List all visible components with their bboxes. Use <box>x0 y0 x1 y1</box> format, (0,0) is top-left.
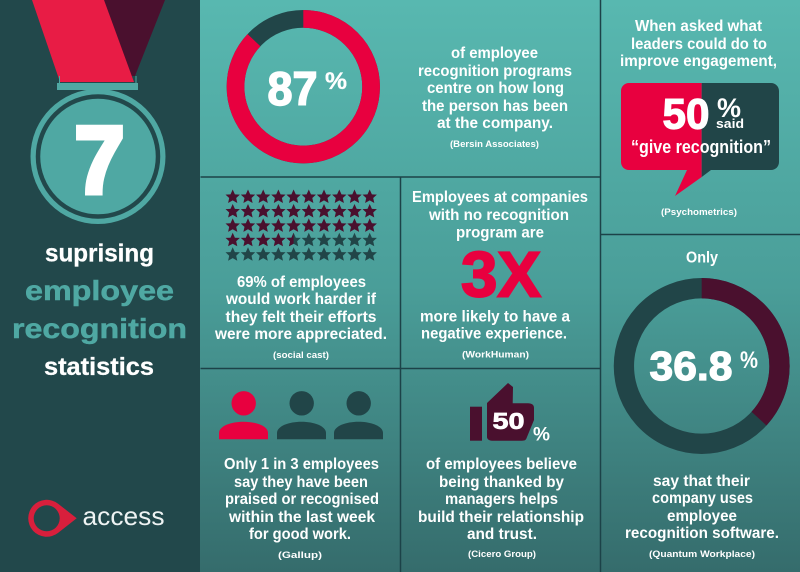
text block: recognition software. <box>625 525 779 542</box>
text block: intro <box>412 189 588 242</box>
text block: improve engagement, <box>620 53 777 70</box>
stat: 50% <box>492 408 550 446</box>
text block: they felt their efforts <box>226 309 376 326</box>
text block: (Bersin Associates) <box>450 139 539 150</box>
icon: people <box>219 391 383 439</box>
text block: of employee <box>451 45 538 62</box>
panel: stars <box>214 190 387 361</box>
stat: 87%: % <box>325 68 347 95</box>
text block: managers helps <box>445 491 558 508</box>
panel: 87 percent <box>235 19 572 154</box>
text block: 69% of employees <box>237 274 366 291</box>
text block: say they have been <box>234 474 368 491</box>
text block <box>418 456 584 560</box>
text block: outcome <box>420 308 570 360</box>
text block: praised or recognised <box>225 491 379 508</box>
text block <box>418 45 572 150</box>
text block: would work harder if <box>225 291 377 308</box>
source: (Psychometrics) <box>661 207 737 218</box>
panel: 3X <box>412 189 588 360</box>
donut chart: 87% <box>235 19 371 154</box>
text block: leaders could do to <box>631 36 767 53</box>
text block: and trust. <box>467 526 537 543</box>
text block: say that their <box>653 473 750 490</box>
text block: were more appreciated. <box>214 326 387 343</box>
stat: 3X: 3X <box>461 238 541 310</box>
title: suprising <box>45 240 154 268</box>
donut chart: 36.8% <box>624 288 780 444</box>
text block: centre on how long <box>427 80 564 97</box>
logo: access <box>28 500 165 537</box>
stat: 50% said <box>631 90 771 157</box>
text block: (Gallup) <box>278 550 322 561</box>
stat: 87% <box>268 62 347 115</box>
text block: When asked what <box>635 18 762 35</box>
text block: within the last week <box>228 509 375 526</box>
title: recognition <box>12 313 187 344</box>
text block: intro: with no recognition <box>428 207 569 224</box>
text block: of employees believe <box>426 456 577 473</box>
stat: 50%: % <box>533 424 550 446</box>
title: statistics <box>44 353 154 381</box>
stat: 50% said: 50 <box>662 90 710 138</box>
stat: 50% said: % <box>717 93 741 123</box>
panel: 1 in 3 <box>219 391 383 561</box>
text block: being thanked by <box>439 474 564 491</box>
icon: medal <box>30 0 166 224</box>
stat: 87%: 87 <box>268 62 318 115</box>
text block: recognition programs <box>418 63 572 80</box>
title: employee <box>25 275 174 306</box>
text block <box>214 274 387 361</box>
medal number: 7 <box>74 107 124 214</box>
text block: intro: Employees at companies <box>412 189 588 206</box>
logo: access: access <box>82 501 164 531</box>
text block: (social cast) <box>273 350 329 361</box>
main background <box>200 0 800 572</box>
text block: intro: program are <box>456 224 544 242</box>
heading: only: Only <box>686 250 718 266</box>
icon: thumbs up <box>470 383 534 441</box>
speech bubble <box>621 83 779 196</box>
text block: employee <box>667 508 737 525</box>
sidebar background <box>0 0 200 572</box>
text block: at the company. <box>437 115 553 132</box>
stat: 50% said: said <box>716 116 744 131</box>
panel: 36.8 percent <box>624 250 780 560</box>
panel: 50% said <box>620 18 779 218</box>
text block: build their relationship <box>418 509 584 526</box>
text block: the person has been <box>422 98 568 115</box>
stat: 36.8%: 36.8 <box>650 343 732 389</box>
text block: Only 1 in 3 employees <box>224 456 379 473</box>
title <box>12 240 187 381</box>
text block: (Quantum Workplace) <box>649 549 755 560</box>
star chart: 69% <box>226 190 377 261</box>
stat: 50% said: “give recognition” <box>631 137 771 157</box>
text block <box>224 456 379 561</box>
text block <box>625 473 779 560</box>
text block: outcome: (WorkHuman) <box>462 350 529 360</box>
text block: outcome: negative experience. <box>421 326 567 342</box>
panel: thumbs up 50% <box>418 383 584 560</box>
text block: outcome: more likely to have a <box>420 308 570 326</box>
stat: 50%: 50 <box>492 408 524 434</box>
text block: (Cicero Group) <box>468 549 536 560</box>
text block <box>620 18 777 70</box>
text block: for good work. <box>249 526 351 543</box>
stat: 36.8%: % <box>740 347 758 374</box>
text block: company uses <box>652 490 753 507</box>
